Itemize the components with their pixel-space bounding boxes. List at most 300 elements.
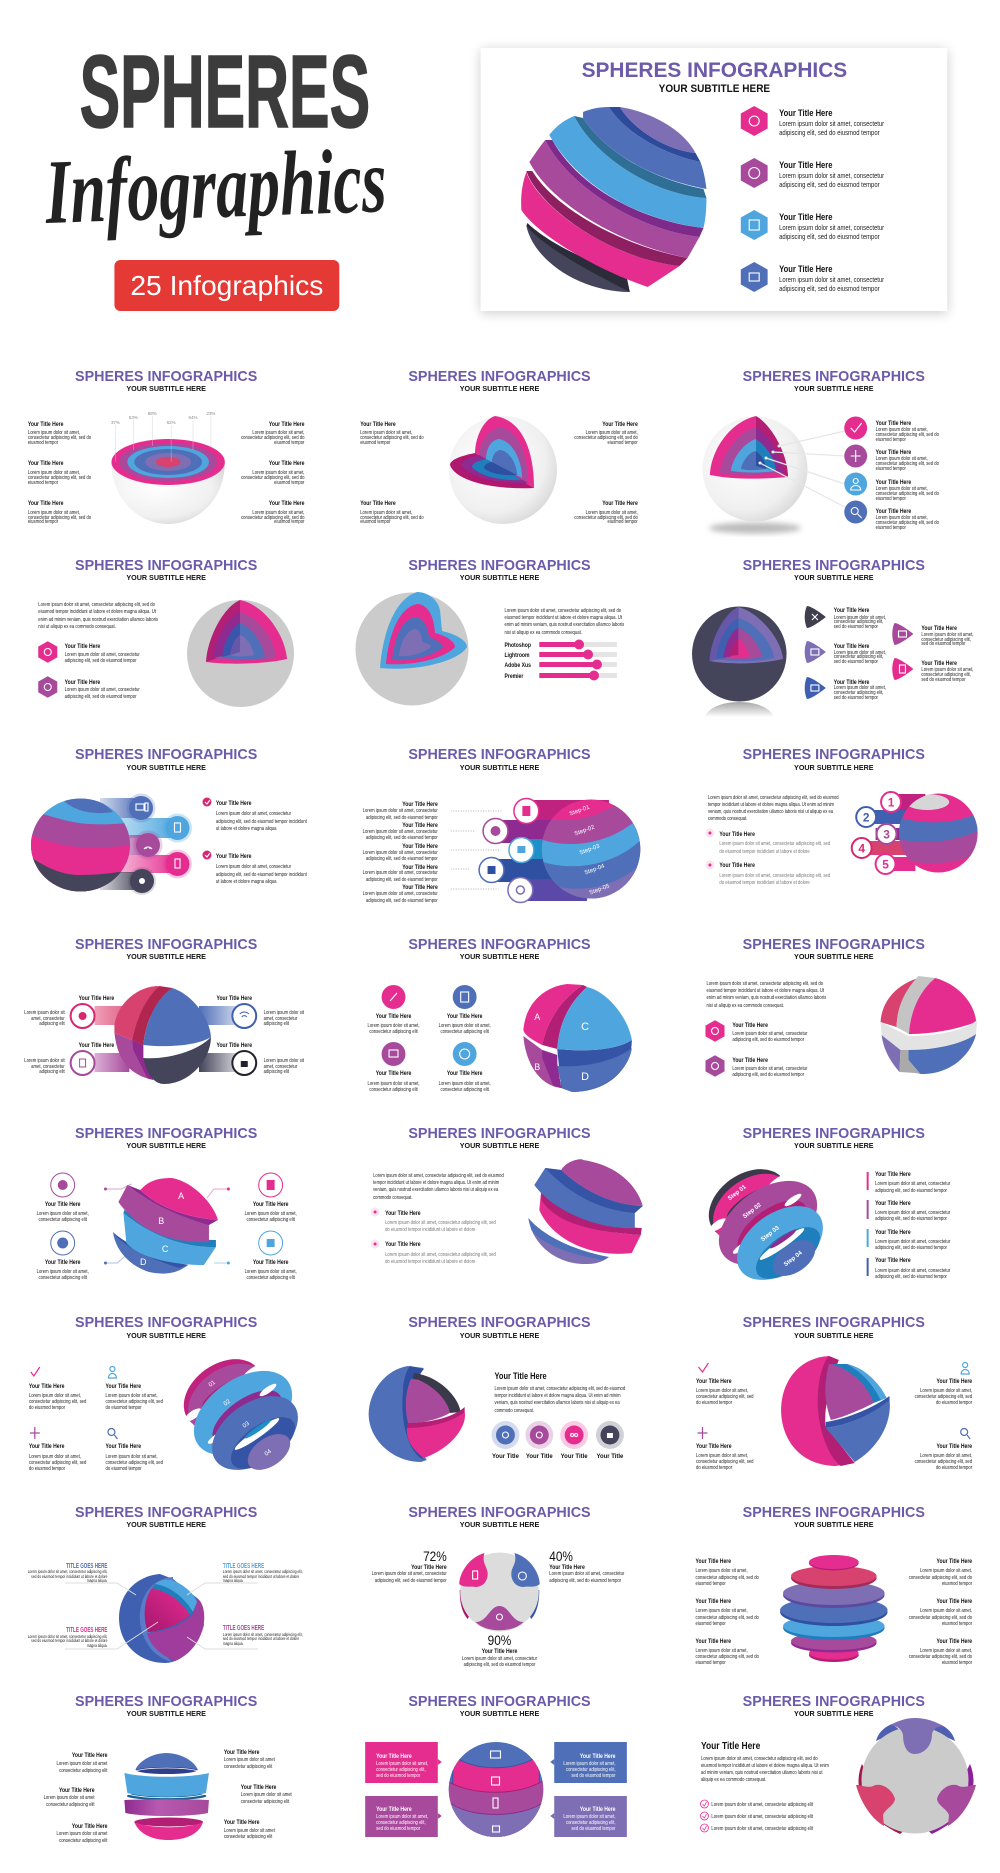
- panel 6 text: sed do eiusmod tempor: [834, 659, 878, 664]
- panel 20 left stat: 72%: [423, 1548, 447, 1564]
- panel 9 heading: [743, 747, 925, 772]
- panel 9: numbered sphere: [705, 747, 985, 885]
- panel 5 paragraph: enim ad minim veniam, quis nostrud exercitation ullamco laboris: [504, 622, 625, 627]
- panel 1 left text: Your Title Here: [28, 422, 63, 428]
- panel 3 text: consectetur adipiscing elit, sed do: [876, 461, 939, 466]
- panel 10 titles: Your Title Here: [216, 1043, 252, 1049]
- panel 23 box blue: Lorem ipsum dolor sit amet,: [563, 1761, 616, 1766]
- panel 14 heading: [408, 1126, 591, 1150]
- panel 10 text right: adipiscing elit: [264, 1069, 290, 1074]
- panel 23 box light purple: Your Title Here: [580, 1807, 616, 1813]
- panel 12 paragraph: eiusmod tempor incididunt ut labore et dolore magna aliqua. Ut: [706, 988, 825, 993]
- panel 5 skill bars: Lightroom: [504, 653, 530, 659]
- panel 13 text left: Your Title Here: [45, 1202, 80, 1208]
- panel 7: sphere with extruded bands: [20, 747, 307, 900]
- hero text blocks: Your Title Here: [779, 107, 833, 118]
- panel 10 text: [24, 1010, 65, 1074]
- panel 6 text right: Your Title Here: [921, 661, 957, 667]
- panel 9 paragraph: veniam, quis nostrud exercitation ullamco laboris nisi ut aliquip ex ea: [708, 809, 833, 814]
- panel 11 heading: YOUR SUBTITLE HERE: [460, 953, 539, 961]
- panel 22 left text: Your Title Here: [59, 1788, 95, 1794]
- panel 17 heading: [408, 1315, 591, 1340]
- panel 12 sphere: [881, 976, 977, 1074]
- panel 14 list items: Lorem ipsum dolor sit amet, consectetur adipiscing elit, sed: [385, 1220, 496, 1225]
- panel 14 list items: do eiusmod tempor incididunt ut labore et dolore: [385, 1259, 476, 1264]
- hero text blocks: Your Title Here: [779, 211, 833, 222]
- panel 5 paragraph: Lorem ipsum dolor sit amet, consectetur adipiscing elit, sed do: [504, 608, 622, 613]
- panel 22 heading: YOUR SUBTITLE HERE: [126, 1710, 206, 1718]
- panel 20 right stat: [549, 1548, 625, 1583]
- panel 8 text: Lorem ipsum dolor sit amet, consectetur: [363, 870, 438, 875]
- hero heading: [582, 59, 847, 95]
- panel 6 text right: consectetur adipiscing elit,: [921, 637, 971, 642]
- panel 20 left stat: adipiscing elit, sed do eiusmod tempor: [375, 1578, 447, 1583]
- panel 8 step labels: [569, 804, 611, 896]
- panel 8 text: Lorem ipsum dolor sit amet, consectetur: [363, 829, 438, 834]
- panel 2 heading: YOUR SUBTITLE HERE: [460, 385, 539, 393]
- panel 21 right text: Lorem ipsum dolor sit amet,: [920, 1608, 972, 1613]
- panel 10 text: Lorem ipsum dolor sit: [24, 1010, 65, 1015]
- panel 16 text second column: Your Title Here: [105, 1444, 141, 1450]
- panel 16 ring sphere: 02: [223, 1398, 232, 1408]
- panel 23 heading: [408, 1694, 591, 1718]
- panel 23 box pink: Your Title Here: [376, 1754, 412, 1760]
- panel 3 leader lines: [758, 431, 845, 507]
- panel 11 sphere: B: [534, 1062, 540, 1072]
- panel 5: heart and skill bars: [355, 558, 625, 706]
- panel 6 heading: [743, 558, 925, 582]
- panel 6 text: Your Title Here: [834, 608, 869, 614]
- panel 18 text right: Your Title Here: [937, 1444, 972, 1450]
- panel 16 text: consectetur adipiscing elit, sed: [29, 1460, 87, 1465]
- panel 21 left text: Lorem ipsum dolor sit amet,: [696, 1608, 748, 1613]
- panel 12 text items: Lorem ipsum dolor sit amet, consectetur: [732, 1031, 808, 1036]
- panel 23 banded sphere: [448, 1742, 544, 1837]
- panel 9 heading: YOUR SUBTITLE HERE: [794, 764, 874, 772]
- panel 12 paragraph: nisi ut aliquip ex ea commodo consequat.: [706, 1003, 784, 1008]
- panel 12 heading: YOUR SUBTITLE HERE: [794, 953, 874, 961]
- panel 6: dark sphere wedge: [692, 558, 973, 717]
- panel 16 text second column: Your Title Here: [105, 1384, 141, 1390]
- panel 9 number circles: 1: [888, 795, 895, 810]
- panel 15 text: Lorem ipsum dolor sit amet, consectetur: [875, 1239, 951, 1244]
- panel 1 right text: consectetur adipiscing elit, sed do: [241, 435, 305, 440]
- panel 21 left text: Your Title Here: [696, 1559, 731, 1565]
- panel 3 text: Your Title Here: [876, 509, 911, 515]
- panel 7 heading: YOUR SUBTITLE HERE: [126, 764, 206, 772]
- hero text blocks: [779, 107, 885, 293]
- panel 1 percent labels: 37%: [111, 420, 120, 425]
- panel 20: grey blob sphere with percentages: [372, 1505, 625, 1667]
- panel 1 heading: [75, 369, 258, 393]
- panel 12 heading: SPHERES INFOGRAPHICS: [743, 937, 925, 953]
- panel 18 text left: consectetur adipiscing elit, sed: [696, 1394, 754, 1399]
- panel 13 sphere slices: A: [178, 1191, 184, 1201]
- panel 11 text grid right: [439, 1014, 491, 1092]
- panel 6 sphere and reflection: [692, 606, 787, 717]
- panel 8 connector bars: [492, 800, 609, 901]
- panel 16 text second column: do eiusmod tempor: [105, 1405, 142, 1410]
- panel 19 left text: sed do eiusmod tempor incididunt ut labore et dolore: [31, 1637, 108, 1643]
- panel 8 heading: YOUR SUBTITLE HERE: [460, 764, 539, 772]
- panel 3 text: eiusmod tempor: [876, 466, 906, 471]
- panel 15 text: adipiscing elit, sed do eiusmod tempor: [875, 1274, 947, 1279]
- panel 21 right text: Lorem ipsum dolor sit amet,: [920, 1568, 972, 1573]
- panel 14 paragraph: veniam, quis nostrud exercitation ullamco laboris nisi ut aliquip ex ea: [373, 1187, 499, 1192]
- panel 20 heading: YOUR SUBTITLE HERE: [460, 1521, 539, 1529]
- panel 23 box purple: [365, 1796, 442, 1837]
- panel 8 heading: [408, 747, 591, 772]
- panel 11 text grid right: consectetur adipiscing elit: [440, 1087, 489, 1092]
- panel 22 right text: Lorem ipsum dolor sit amet: [224, 1828, 275, 1833]
- panel 2 left text: Your Title Here: [360, 501, 396, 507]
- panel 21 left text: Your Title Here: [696, 1639, 731, 1645]
- panel 4 paragraph: enim ad minim veniam, quis nostrud exercitation ullamco laboris: [38, 617, 159, 622]
- panel 23 box purple: Lorem ipsum dolor sit amet,: [376, 1814, 428, 1819]
- panel 24 check list: [700, 1800, 814, 1832]
- panel 6 shield icons: [805, 606, 913, 699]
- panel 19 right text: Lorem ipsum dolor sit amet, consectetur adipiscing elit,: [223, 1631, 303, 1637]
- panel 10 text: adipiscing elit: [39, 1021, 65, 1026]
- panel 10 heading: YOUR SUBTITLE HERE: [126, 953, 206, 961]
- panel 15 text: Your Title Here: [875, 1172, 911, 1178]
- panel 9 list items: do eiusmod tempor incididunt ut labore et dolore: [719, 849, 810, 854]
- panel 11 text grid right: Lorem ipsum dolor sit amet,: [439, 1023, 491, 1028]
- panel 15 ring sphere: Step 03: [760, 1225, 781, 1243]
- panel 15 text: adipiscing elit, sed do eiusmod tempor: [875, 1216, 947, 1221]
- panel 1 right text: eiusmod tempor: [274, 440, 305, 445]
- panel 23 box pink: Lorem ipsum dolor sit amet,: [376, 1761, 428, 1766]
- panel 22 left text: consectetur adipiscing elit: [46, 1802, 95, 1807]
- panel 2 right text: Lorem ipsum dolor sit amet,: [586, 430, 638, 435]
- panel 21 heading: [743, 1505, 925, 1529]
- panel 20 bottom stat: adipiscing elit, sed do eiusmod tempor: [464, 1662, 536, 1667]
- panel 17 text: [495, 1371, 626, 1413]
- panel 3 text: Your Title Here: [876, 480, 911, 486]
- panel 24 text: [701, 1740, 829, 1782]
- panel 9 paragraph: Lorem ipsum dolor sit amet, consectetur adipiscing elit, sed do eiusmod: [708, 795, 839, 800]
- panel 17 text: veniam, quis nostrud exercitation ullamco laboris nisi ut aliquip ex ea: [495, 1400, 620, 1405]
- panel 23 box purple: sed do eiusmod tempor: [376, 1826, 421, 1831]
- panel 24 text: Lorem ipsum dolor sit amet, consectetur adipiscing elit, sed do: [701, 1756, 818, 1761]
- panel 11 text grid right: Your Title Here: [447, 1071, 482, 1077]
- panel 1 left text: eiusmod tempor: [28, 519, 59, 524]
- panel 21 right text: consectetur adipiscing elit, sed do: [909, 1615, 973, 1620]
- panel: hero card: [481, 48, 947, 313]
- panel 7 text item 1: Lorem ipsum dolor sit amet, consectetur: [216, 811, 291, 816]
- panel 7 text item 2: Your Title Here: [216, 854, 251, 860]
- panel 21 right text: Your Title Here: [937, 1599, 972, 1605]
- panel 8: step sphere: [363, 747, 647, 905]
- panel 16 text second column: Lorem ipsum dolor sit amet,: [105, 1454, 158, 1459]
- panel 15 text: adipiscing elit, sed do eiusmod tempor: [875, 1188, 947, 1193]
- panel 1 left text: Your Title Here: [28, 461, 63, 467]
- panel 14 heading: SPHERES INFOGRAPHICS: [408, 1126, 591, 1142]
- panel 6 text: Lorem ipsum dolor sit amet,: [834, 650, 886, 655]
- panel 10 text: Lorem ipsum dolor sit: [24, 1058, 65, 1063]
- panel 3 text: eiusmod tempor: [876, 525, 906, 530]
- panel 5 skill bars: Adobe Xus: [504, 663, 531, 669]
- panel 20 bottom stat: Lorem ipsum dolor sit amet, consectetur: [462, 1656, 537, 1661]
- panel 8 text: adipiscing elit, sed do eiusmod tempor: [366, 877, 438, 882]
- panel 17 heading: SPHERES INFOGRAPHICS: [408, 1315, 591, 1331]
- panel 12 hexagon icons: [705, 1020, 725, 1077]
- panel 2 left text: consectetur adipiscing elit, sed do: [360, 435, 424, 440]
- panel 9 list items: [705, 828, 831, 885]
- panel 8 text: adipiscing elit, sed do eiusmod tempor: [366, 898, 438, 903]
- panel 21 left text: consectetur adipiscing elit, sed do: [696, 1615, 759, 1620]
- panel 23 box blue: sed do eiusmod tempor: [571, 1773, 616, 1778]
- panel 5 heading: YOUR SUBTITLE HERE: [460, 574, 539, 582]
- panel 22 left text: Your Title Here: [72, 1824, 107, 1830]
- panel 2 left text: consectetur adipiscing elit, sed do: [360, 515, 424, 520]
- panel 2 left text: Lorem ipsum dolor sit amet,: [360, 510, 412, 515]
- panel 4 heading: SPHERES INFOGRAPHICS: [75, 558, 258, 574]
- panel 17 circle labels: [492, 1454, 624, 1460]
- panel 13 sphere slices: C: [162, 1244, 169, 1254]
- panel 23 box pink: sed do eiusmod tempor: [376, 1773, 421, 1778]
- panel 17 sphere: [369, 1366, 465, 1462]
- panel 16 text: Your Title Here: [29, 1444, 64, 1450]
- panel 20 left stat: [372, 1548, 447, 1583]
- panel 19 right text: magna aliqua.: [223, 1640, 243, 1646]
- panel 2 left text: Lorem ipsum dolor sit amet,: [360, 430, 412, 435]
- panel 9 connectors: [862, 794, 925, 871]
- panel 1 percent labels: 62%: [167, 420, 176, 425]
- panel 18 text left: Your Title Here: [696, 1444, 732, 1450]
- panel 24 text: Your Title Here: [701, 1740, 760, 1751]
- panel 20 left stat: Lorem ipsum dolor sit amet, consectetur: [372, 1571, 447, 1576]
- panel 18 line icons: [697, 1362, 970, 1439]
- panel 14 sphere slices: [528, 1159, 643, 1264]
- panel 21 disc stack: [780, 1555, 888, 1662]
- panel 18 text left: Lorem ipsum dolor sit amet,: [696, 1453, 748, 1458]
- panel 6 text: sed do eiusmod tempor: [834, 624, 878, 629]
- panel 7 icon circles: [126, 794, 192, 895]
- panel 19 heading: YOUR SUBTITLE HERE: [126, 1521, 206, 1529]
- panel 6 text: [834, 608, 886, 700]
- panel 8 text: Your Title Here: [402, 885, 438, 891]
- panel 10 heading: [75, 937, 258, 961]
- hero sliced sphere: [521, 107, 706, 292]
- panel 4 text items: Lorem ipsum dolor sit amet, consectetur: [65, 687, 140, 692]
- panel 9 list items: Your Title Here: [719, 863, 755, 869]
- hero text blocks: adipiscing elit, sed do eiusmod tempor: [779, 130, 880, 137]
- panel 21 right text: Your Title Here: [937, 1639, 972, 1645]
- panel 3 sphere: [702, 416, 807, 534]
- panel 23 box blue: [550, 1742, 627, 1783]
- panel 15 heading: YOUR SUBTITLE HERE: [794, 1142, 874, 1150]
- panel 4 text items: adipiscing elit, sed do eiusmod tempor: [65, 658, 137, 663]
- panel 5 paragraph: [504, 608, 625, 635]
- panel 14 list items: [371, 1208, 496, 1264]
- panel 20 bottom stat: Your Title Here: [482, 1649, 517, 1655]
- panel 13 sphere slices: B: [158, 1216, 164, 1226]
- hero text blocks: adipiscing elit, sed do eiusmod tempor: [779, 182, 880, 189]
- panel 18 text right: [915, 1379, 973, 1470]
- panel 6 text right: sed do eiusmod tempor: [921, 641, 966, 646]
- panel 14 list items: Your Title Here: [385, 1211, 421, 1217]
- panel 15 text: Lorem ipsum dolor sit amet, consectetur: [875, 1210, 951, 1215]
- panel 11 text grid: Your Title Here: [376, 1071, 411, 1077]
- panel 9 list items: Your Title Here: [719, 832, 755, 838]
- panel 11 heading: SPHERES INFOGRAPHICS: [408, 937, 591, 953]
- panel 14 list items: Lorem ipsum dolor sit amet, consectetur adipiscing elit, sed: [385, 1252, 496, 1257]
- panel 3 text: consectetur adipiscing elit, sed do: [876, 520, 939, 525]
- panel 4 text items: [65, 644, 140, 699]
- panel 18 text left: consectetur adipiscing elit, sed: [696, 1459, 754, 1464]
- panel 1 right text: Your Title Here: [269, 501, 304, 507]
- panel 16 ring sphere: 01: [208, 1379, 217, 1389]
- panel 13 text right: [245, 1202, 297, 1280]
- panel 13 text left: Lorem ipsum dolor sit amet,: [37, 1211, 89, 1216]
- panel 1 heading: SPHERES INFOGRAPHICS: [75, 369, 258, 385]
- panel 16 text second column: Lorem ipsum dolor sit amet,: [105, 1393, 158, 1398]
- panel 16 ring sphere: 03: [242, 1420, 251, 1430]
- panel 1 right text: Lorem ipsum dolor sit amet,: [252, 510, 304, 515]
- panel 16 text: do eiusmod tempor: [29, 1405, 65, 1410]
- panel 16 text: consectetur adipiscing elit, sed: [29, 1399, 87, 1404]
- panel 15 ring sphere: Step 04: [783, 1250, 804, 1268]
- panel 12 text items: adipiscing elit, sed do eiusmod tempor: [732, 1072, 805, 1077]
- panel 22 right text: consectetur adipiscing elit: [224, 1834, 273, 1839]
- panel 19 right text: [223, 1563, 303, 1646]
- panel 8 dotted leaders: [451, 811, 502, 889]
- panel 13 text right: consectetur adipiscing elit: [246, 1217, 295, 1222]
- panel 10 text right: [264, 1010, 305, 1074]
- panel 2 left text: eiusmod tempor: [360, 440, 391, 445]
- panel 19 left text: Lorem ipsum dolor sit amet, consectetur adipiscing elit,: [28, 1568, 107, 1574]
- panel 8 text: Lorem ipsum dolor sit amet, consectetur: [363, 850, 438, 855]
- panel 22 right text: Lorem ipsum dolor sit amet: [224, 1757, 275, 1762]
- panel 11 text grid right: consectetur adipiscing elit: [440, 1029, 489, 1034]
- panel 18 text left: Lorem ipsum dolor sit amet,: [696, 1388, 748, 1393]
- panel 12 paragraph: enim ad minim veniam, quis nostrud exercitation ullamco laboris: [706, 995, 827, 1000]
- panel 3 heading: [743, 369, 925, 393]
- panel 3 text: Your Title Here: [876, 450, 911, 456]
- panel 1 left text: Lorem ipsum dolor sit amet,: [28, 510, 80, 515]
- panel 12 text items: adipiscing elit, sed do eiusmod tempor: [732, 1037, 805, 1042]
- panel 23 box blue: consectetur adipiscing elit,: [566, 1767, 616, 1772]
- panel 24: puzzle sphere: [700, 1694, 976, 1834]
- panel 20 heading: [408, 1505, 591, 1529]
- panel 13 text left: consectetur adipiscing elit: [38, 1217, 88, 1222]
- panel 19 right text: TITLE GOES HERE: [223, 1625, 264, 1632]
- panel 20 heading: SPHERES INFOGRAPHICS: [408, 1505, 591, 1521]
- panel 5 skill bars: Premier: [504, 674, 524, 680]
- hero heading: YOUR SUBTITLE HERE: [659, 83, 770, 95]
- panel 9 number circles: 4: [858, 841, 865, 856]
- panel 8 banded sphere: [542, 800, 640, 898]
- panel 16 text: Lorem ipsum dolor sit amet,: [29, 1454, 81, 1459]
- panel 21 heading: SPHERES INFOGRAPHICS: [743, 1505, 925, 1521]
- panel 18 text left: do eiusmod tempor: [696, 1400, 733, 1405]
- panel 24 heading: [743, 1694, 925, 1718]
- panel 1 percent labels: 23%: [206, 411, 215, 416]
- heading: SPHERES: SPHERES: [80, 34, 370, 149]
- panel 23 band icons: [491, 1751, 500, 1832]
- panel 11 sphere: D: [581, 1071, 589, 1083]
- panel 8 text: Lorem ipsum dolor sit amet, consectetur: [363, 891, 438, 896]
- panel 8 step labels: Step-01: [569, 804, 591, 817]
- panel 11 text grid: [367, 1014, 420, 1092]
- panel 10 sphere: [114, 986, 211, 1084]
- panel 19 heading: [75, 1505, 258, 1529]
- panel 6 text: consectetur adipiscing elit,: [834, 619, 883, 624]
- panel 3 text: Lorem ipsum dolor sit amet,: [876, 427, 928, 432]
- panel 4 heading: [75, 558, 258, 582]
- panel 7 text item 2: Lorem ipsum dolor sit amet, consectetur: [216, 864, 291, 869]
- panel 2 right text: Your Title Here: [602, 501, 638, 507]
- panel 17 circle labels: Your Title: [526, 1454, 553, 1460]
- panel 23 box pink: [365, 1742, 442, 1783]
- panel 23 heading: SPHERES INFOGRAPHICS: [408, 1694, 591, 1710]
- panel 23 box purple: consectetur adipiscing elit,: [376, 1820, 426, 1825]
- panel 21 left text: eiusmod tempor: [696, 1621, 726, 1626]
- panel 11 heading: [408, 937, 591, 961]
- panel 21 heading: YOUR SUBTITLE HERE: [794, 1521, 874, 1529]
- panel 19: anatomy sphere with callouts: [28, 1505, 303, 1663]
- panel 13 heading: YOUR SUBTITLE HERE: [126, 1142, 206, 1150]
- panel 17 heading: YOUR SUBTITLE HERE: [460, 1332, 539, 1340]
- panel 21 right text: consectetur adipiscing elit, sed do: [909, 1575, 973, 1580]
- panel 6 text: Your Title Here: [834, 644, 869, 650]
- panel 2 left text: Your Title Here: [360, 422, 396, 428]
- panel 20 sphere: [459, 1552, 540, 1632]
- panel 8 text: Your Title Here: [402, 865, 438, 871]
- panel 22 left text: consectetur adipiscing elit: [59, 1768, 108, 1773]
- panel 18 text right: Lorem ipsum dolor sit amet,: [920, 1388, 972, 1393]
- panel 5 paragraph: eiusmod tempor incididunt ut labore et dolore magna aliqua. Ut: [504, 615, 623, 620]
- panel 11 sphere: [523, 984, 632, 1092]
- panel 6 text: sed do eiusmod tempor: [834, 695, 878, 700]
- panel 22 left text: Your Title Here: [72, 1753, 107, 1759]
- panel 4: grey sphere wedge: [38, 558, 294, 707]
- panel 22 right text: Your Title Here: [241, 1785, 276, 1791]
- panel 21 left text: consectetur adipiscing elit, sed do: [696, 1575, 759, 1580]
- panel 1 right text: consectetur adipiscing elit, sed do: [241, 515, 305, 520]
- panel 21 left text: [696, 1559, 759, 1665]
- panel 16 text: do eiusmod tempor: [29, 1466, 65, 1471]
- panel 11 text grid: Lorem ipsum dolor sit amet,: [367, 1081, 420, 1086]
- panel 16 text: Your Title Here: [29, 1384, 64, 1390]
- panel 19 right text: Lorem ipsum dolor sit amet, consectetur adipiscing elit,: [223, 1568, 303, 1574]
- panel 8 text: adipiscing elit, sed do eiusmod tempor: [366, 835, 438, 840]
- panel 3 text: Lorem ipsum dolor sit amet,: [876, 486, 928, 491]
- panel 8 icon circles: [479, 798, 539, 902]
- panel 12 paragraph: [706, 981, 827, 1008]
- panel 11 text grid right: Your Title Here: [447, 1014, 482, 1020]
- panel 19 left text: Lorem ipsum dolor sit amet, consectetur adipiscing elit,: [28, 1633, 107, 1639]
- panel 1 right text: eiusmod tempor: [274, 480, 305, 485]
- panel 1 right text: Lorem ipsum dolor sit amet,: [252, 430, 304, 435]
- panel 1 left text: consectetur adipiscing elit, sed do: [28, 515, 92, 520]
- panel 9 number circles: 2: [863, 810, 870, 825]
- panel 18 text right: do eiusmod tempor: [936, 1465, 973, 1470]
- panel 7 text item 1: adipiscing elit, sed do eiusmod tempor incididunt: [216, 819, 307, 824]
- panel 10 titles: Your Title Here: [216, 996, 252, 1002]
- panel 23 box blue: Your Title Here: [580, 1754, 616, 1760]
- panel 22 right text: consectetur adipiscing elit: [241, 1799, 290, 1804]
- panel 9 paragraph: tempor incididunt ut labore et dolore magna aliqua. Ut enim ad minim: [708, 802, 834, 807]
- panel 10 connectors: [95, 1006, 239, 1072]
- panel 10 ring icons: [71, 1004, 256, 1075]
- hero text blocks: Your Title Here: [779, 263, 833, 274]
- panel 13 sphere slices: D: [140, 1257, 147, 1267]
- panel 1 left text: Lorem ipsum dolor sit amet,: [28, 430, 80, 435]
- panel 8 text: Lorem ipsum dolor sit amet, consectetur: [363, 808, 438, 813]
- panel 1 left text: [28, 422, 92, 524]
